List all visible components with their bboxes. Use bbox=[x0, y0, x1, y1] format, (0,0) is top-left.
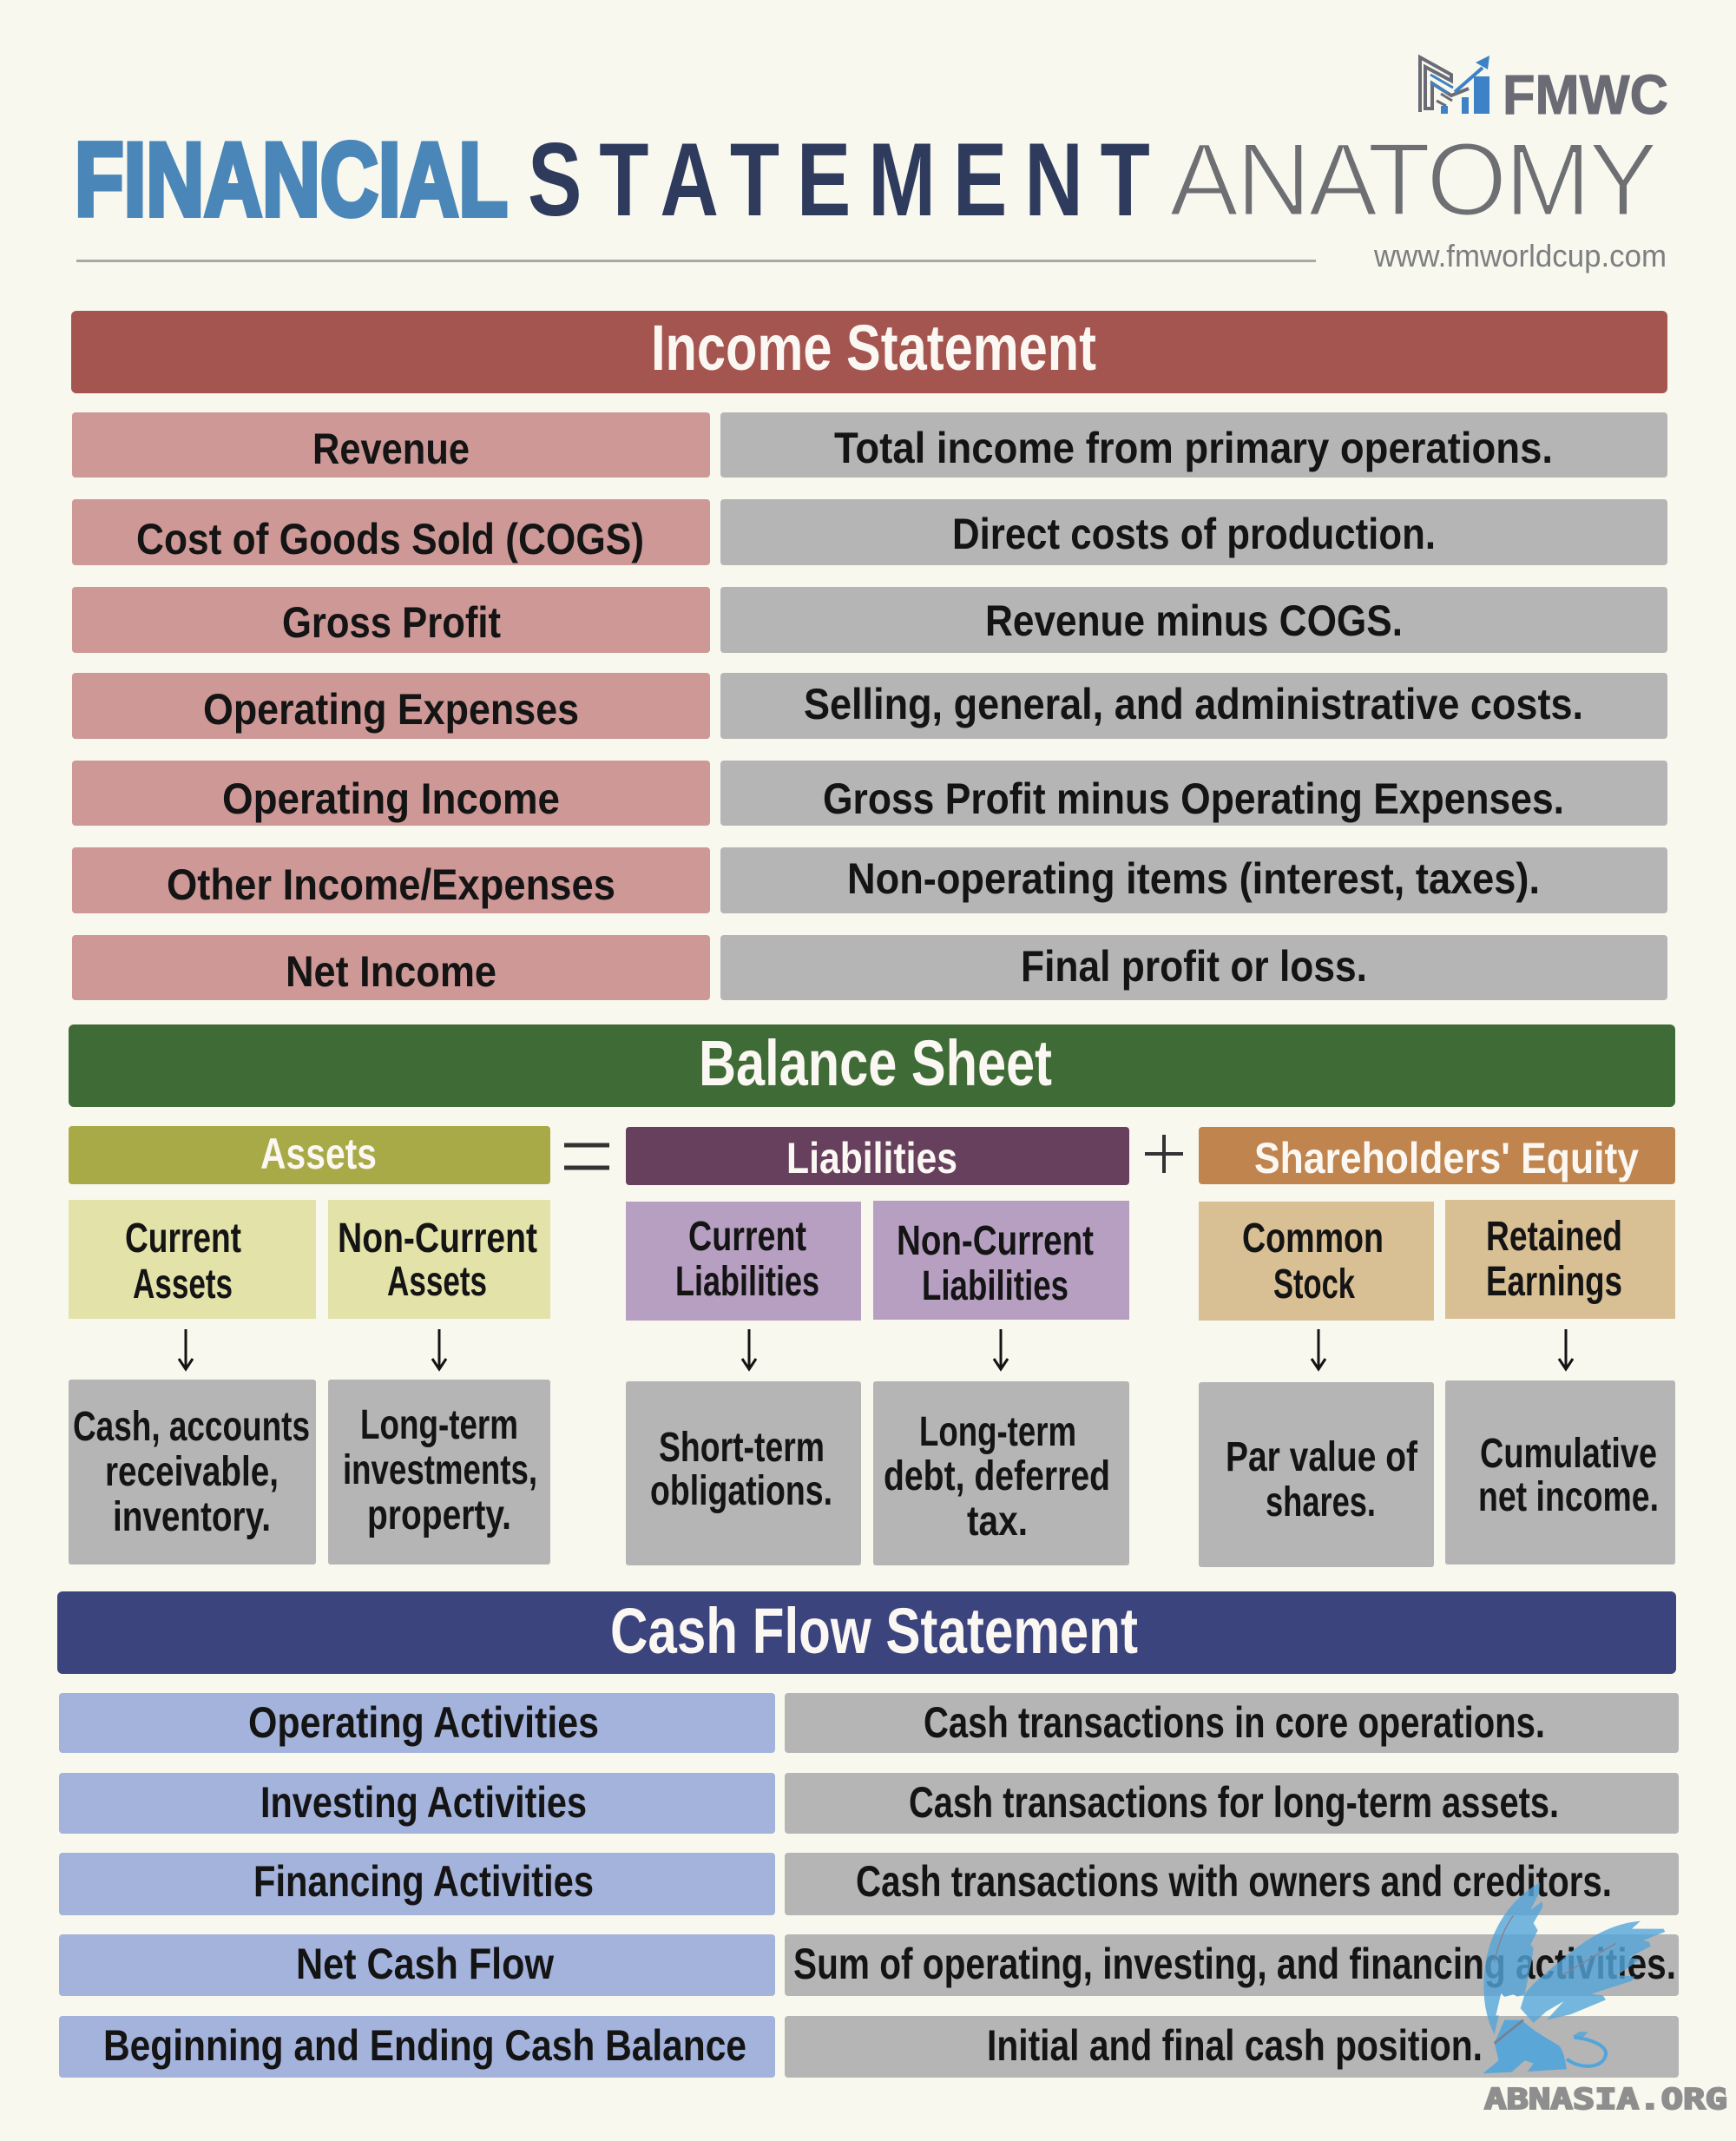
row: Operating Income: Gross Profit minus Operating Expenses. bbox=[823, 774, 1564, 823]
box: common stock: Stock bbox=[1273, 1262, 1355, 1308]
row: Operating Activities: Cash transactions in core operations. bbox=[924, 1698, 1545, 1747]
row: Cost of Goods Sold: Direct costs of production. bbox=[952, 510, 1436, 558]
box: current assets: Assets bbox=[133, 1262, 233, 1308]
row: Investing Activities: Cash transactions for long-term assets. bbox=[909, 1778, 1559, 1827]
watermark: ABNASIA.ORG: ABNASIA.ORG bbox=[1484, 2082, 1727, 2116]
box: non-current assets description: Long-term bbox=[360, 1402, 518, 1448]
row: Net Income: Final profit or loss. bbox=[1021, 942, 1367, 991]
row: Gross Profit: Gross Profit bbox=[282, 598, 501, 647]
row: Operating Expenses: Selling, general, and administrative costs. bbox=[804, 680, 1583, 728]
title word: STATEMENT: STATEMENT bbox=[528, 122, 1150, 238]
box: current assets description bbox=[69, 1380, 316, 1565]
title bbox=[75, 122, 1658, 238]
box: retained earnings: Earnings bbox=[1486, 1259, 1622, 1305]
balance sheet heading bbox=[69, 1024, 1675, 1107]
arrow: retained earnings down bbox=[1559, 1329, 1573, 1369]
row: Financing Activities: Financing Activities bbox=[253, 1857, 594, 1906]
arrow: non-current liabilities down bbox=[994, 1329, 1008, 1369]
row: Cost of Goods Sold: Cost of Goods Sold (COGS) bbox=[136, 515, 644, 563]
box: retained earnings description: net income. bbox=[1478, 1474, 1659, 1520]
arrow: current assets down bbox=[179, 1329, 193, 1369]
row: Revenue: Total income from primary operations. bbox=[834, 424, 1553, 472]
box: current assets description: receivable, bbox=[105, 1449, 279, 1495]
row: Revenue bbox=[72, 412, 1667, 478]
box: non-current assets description: property. bbox=[367, 1492, 511, 1538]
row: Other Income/Expenses: Other Income/Expenses bbox=[167, 860, 615, 909]
row: Revenue: Revenue bbox=[312, 425, 470, 473]
box: current liabilities description bbox=[626, 1381, 861, 1565]
icon: plus sign bbox=[1145, 1135, 1183, 1173]
icon: FMWC chart mark bbox=[1420, 56, 1489, 114]
row: Operating Expenses bbox=[72, 673, 1667, 739]
column: assets bbox=[69, 1126, 550, 1565]
income statement heading bbox=[71, 311, 1667, 393]
box: non-current assets: Non-Current bbox=[338, 1215, 537, 1262]
row: Beginning and Ending Cash Balance: Initial and final cash position. bbox=[987, 2021, 1483, 2070]
row: Investing Activities bbox=[59, 1773, 1679, 1834]
balance sheet heading: Balance Sheet bbox=[699, 1027, 1052, 1099]
row: Net Income: Net Income bbox=[286, 947, 496, 996]
liabilities header bbox=[626, 1127, 1129, 1185]
box: current assets description: inventory. bbox=[113, 1494, 271, 1540]
arrow: non-current assets down bbox=[432, 1329, 446, 1369]
box: current liabilities: Current bbox=[688, 1214, 806, 1260]
row: Net Income bbox=[72, 935, 1667, 1000]
box: current liabilities bbox=[626, 1202, 861, 1321]
box: common stock: Common bbox=[1242, 1215, 1384, 1262]
box: non-current liabilities description bbox=[873, 1381, 1129, 1565]
row: Investing Activities: Investing Activities bbox=[260, 1778, 587, 1827]
box: current assets: Current bbox=[125, 1215, 241, 1262]
row: Beginning and Ending Cash Balance bbox=[59, 2016, 1679, 2078]
box: common stock description bbox=[1199, 1382, 1434, 1567]
box: non-current liabilities description: Long-term bbox=[919, 1409, 1076, 1455]
box: non-current liabilities: Non-Current bbox=[897, 1218, 1094, 1264]
row: Operating Income bbox=[72, 761, 1667, 826]
box: current liabilities description: Short-term bbox=[659, 1425, 825, 1471]
panel: income statement bbox=[71, 311, 1667, 1000]
row: Gross Profit bbox=[72, 587, 1667, 653]
row: Net Cash Flow bbox=[59, 1934, 1679, 1996]
box: non-current assets bbox=[328, 1200, 550, 1319]
title word: FINANCIAL: FINANCIAL bbox=[75, 122, 508, 238]
box: non-current assets description bbox=[328, 1380, 550, 1565]
box: current assets description: Cash, accounts bbox=[73, 1404, 310, 1450]
box: non-current liabilities description: tax. bbox=[967, 1499, 1028, 1545]
box: non-current liabilities: Liabilities bbox=[922, 1263, 1069, 1309]
watermark: griffin icon bbox=[1483, 1882, 1665, 2073]
cash flow statement heading bbox=[57, 1591, 1676, 1674]
box: common stock bbox=[1199, 1202, 1434, 1321]
website url: www.fmworldcup.com bbox=[1373, 238, 1667, 273]
box: common stock description: shares. bbox=[1266, 1479, 1376, 1525]
box: current assets bbox=[69, 1200, 316, 1319]
box: retained earnings description bbox=[1445, 1380, 1675, 1565]
shareholders' equity header: Shareholders' Equity bbox=[1254, 1134, 1639, 1182]
icon: equals sign bbox=[564, 1145, 609, 1168]
income statement heading: Income Statement bbox=[651, 312, 1096, 384]
box: retained earnings bbox=[1445, 1200, 1675, 1319]
row: Financing Activities bbox=[59, 1853, 1679, 1915]
liabilities header: Liabilities bbox=[786, 1134, 957, 1182]
box: non-current assets description: investments, bbox=[343, 1447, 537, 1493]
title word: ANATOMY: ANATOMY bbox=[1169, 122, 1658, 238]
box: current liabilities description: obligations. bbox=[650, 1468, 832, 1514]
logo wordmark: FMWC bbox=[1503, 63, 1668, 126]
box: retained earnings: Retained bbox=[1486, 1214, 1622, 1260]
row: Net Cash Flow: Net Cash Flow bbox=[296, 1940, 554, 1988]
box: non-current assets: Assets bbox=[387, 1259, 487, 1305]
panel: cash flow statement bbox=[57, 1591, 1679, 2078]
box: non-current liabilities bbox=[873, 1201, 1129, 1320]
row: Operating Expenses: Operating Expenses bbox=[203, 685, 579, 734]
row: Gross Profit: Revenue minus COGS. bbox=[985, 596, 1403, 645]
assets header: Assets bbox=[260, 1130, 377, 1178]
box: current liabilities: Liabilities bbox=[675, 1259, 819, 1305]
row: Other Income/Expenses: Non-operating items (interest, taxes). bbox=[847, 854, 1540, 903]
arrow: common stock down bbox=[1312, 1329, 1325, 1369]
panel: balance sheet bbox=[69, 1024, 1675, 1567]
row: Operating Income: Operating Income bbox=[222, 774, 560, 823]
box: common stock description: Par value of bbox=[1226, 1434, 1418, 1480]
assets header bbox=[69, 1126, 550, 1184]
row: Beginning and Ending Cash Balance: Beginning and Ending Cash Balance bbox=[103, 2021, 746, 2070]
arrow: current liabilities down bbox=[742, 1329, 756, 1369]
logo: FMWC bbox=[1420, 56, 1668, 126]
box: retained earnings description: Cumulative bbox=[1480, 1431, 1657, 1477]
column: liabilities bbox=[626, 1127, 1129, 1565]
cash flow statement heading: Cash Flow Statement bbox=[610, 1595, 1138, 1667]
row: Operating Activities: Operating Activities bbox=[248, 1698, 599, 1747]
row: Cost of Goods Sold bbox=[72, 499, 1667, 565]
row: Operating Activities bbox=[59, 1693, 1679, 1753]
row: Other Income/Expenses bbox=[72, 847, 1667, 913]
column: shareholders' equity bbox=[1199, 1127, 1675, 1567]
box: non-current liabilities description: debt, deferred bbox=[884, 1453, 1110, 1499]
